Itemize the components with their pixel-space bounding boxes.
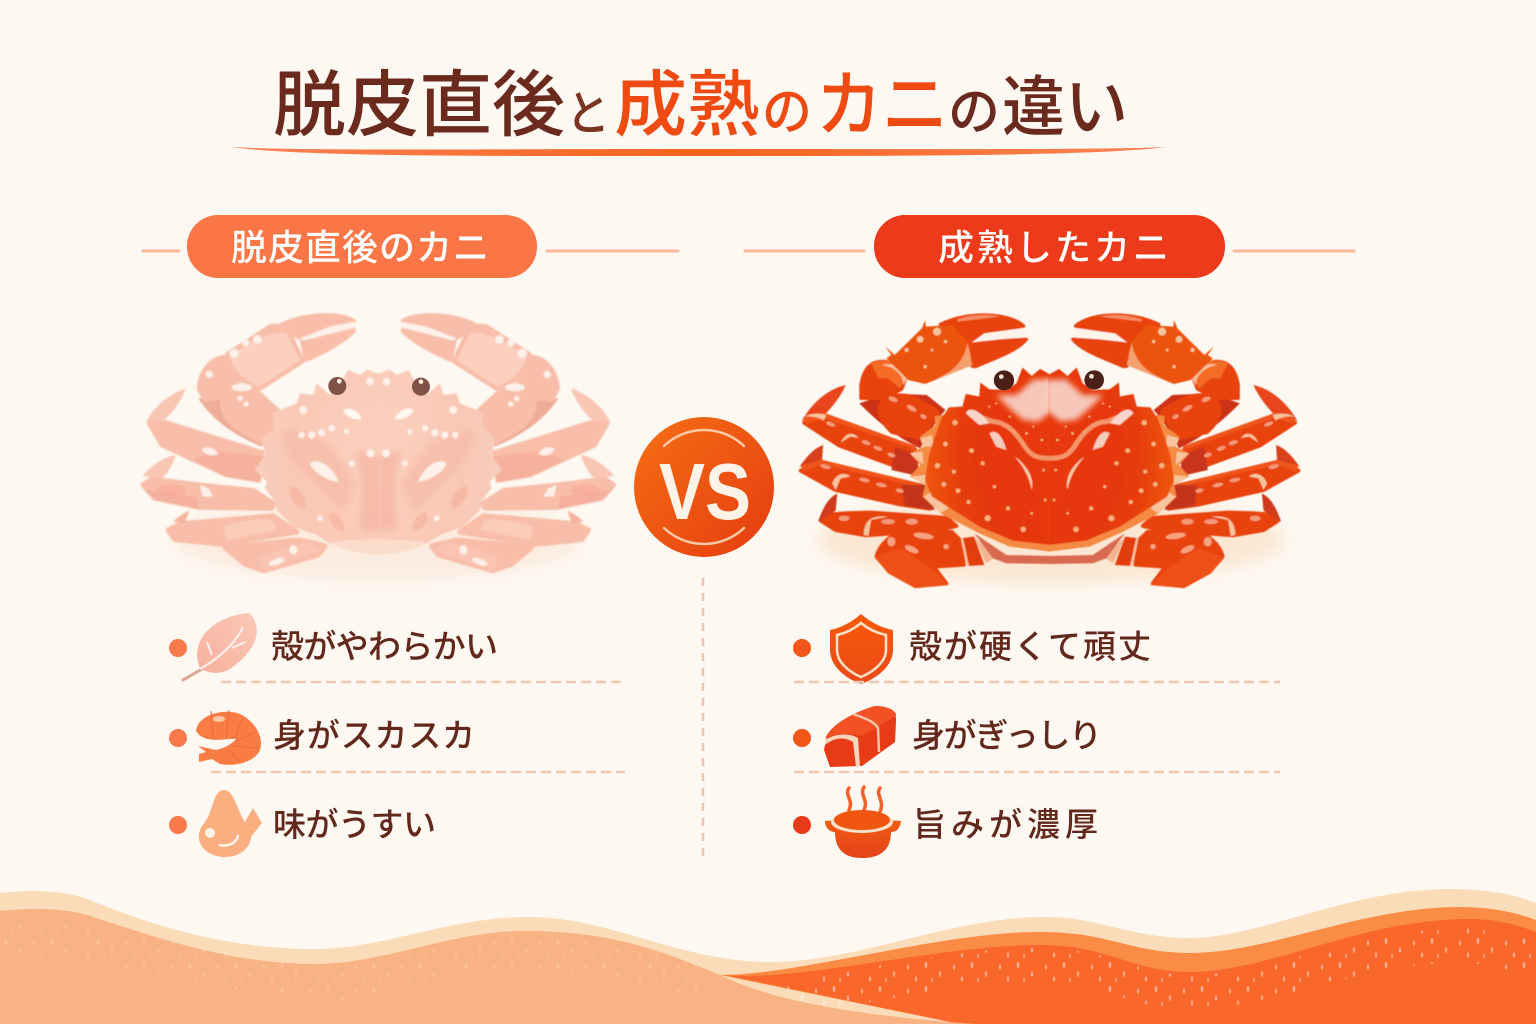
dashed dividers <box>211 682 1280 772</box>
trait: hard shell: 殻が硬くて頑丈 <box>909 628 1151 665</box>
trait: soft shell: 殻がやわらかい <box>271 628 498 665</box>
trait: packed meat: 身がぎっしり <box>912 717 1102 754</box>
wave band: light top layer <box>0 889 1536 1024</box>
header: soft crab: 脱皮直後のカニ <box>231 227 489 268</box>
title: 成熟 <box>614 66 760 146</box>
VS badge <box>634 417 774 557</box>
header: mature crab: 成熟したカニ <box>938 227 1169 268</box>
illustration: mature red crab <box>799 315 1300 588</box>
trait: mild taste: 味がうすい <box>273 806 436 843</box>
title: の <box>948 84 1000 142</box>
wave band: right deep orange layer <box>725 919 1536 1024</box>
icon: shrimp <box>196 710 261 765</box>
VS badge: VS <box>659 447 751 536</box>
icon: meat block <box>824 706 896 767</box>
list: mature crab traits <box>793 614 1151 858</box>
title: と <box>566 88 610 141</box>
wave band: right orange layer <box>720 907 1536 1024</box>
title: の <box>762 84 812 142</box>
list: soft crab traits <box>169 613 498 857</box>
trait: sparse meat: 身がスカスカ <box>273 717 475 754</box>
header: mature crab <box>745 215 1354 278</box>
trait: packed meat <box>793 706 1102 767</box>
icon: shield <box>830 614 893 684</box>
title: カニ <box>816 66 948 146</box>
trait: mild taste <box>169 790 436 857</box>
trait: soft shell <box>169 613 498 680</box>
title underline <box>232 147 1166 156</box>
icon: feather <box>183 613 257 680</box>
trait: rich taste <box>793 787 1098 858</box>
title: 違い <box>1002 70 1128 144</box>
center divider <box>702 578 704 862</box>
icon: flavor drop <box>199 790 262 857</box>
icon: steaming pot <box>825 787 901 858</box>
wave band: left peach layer <box>0 909 975 1024</box>
header: soft crab <box>143 215 678 278</box>
illustration: soft pale crab <box>143 316 614 580</box>
trait: sparse meat <box>169 710 475 765</box>
title: 脱皮直後 <box>273 66 565 146</box>
title <box>273 66 1128 146</box>
trait: rich taste: 旨みが濃厚 <box>913 806 1098 843</box>
trait: hard shell <box>793 614 1151 684</box>
